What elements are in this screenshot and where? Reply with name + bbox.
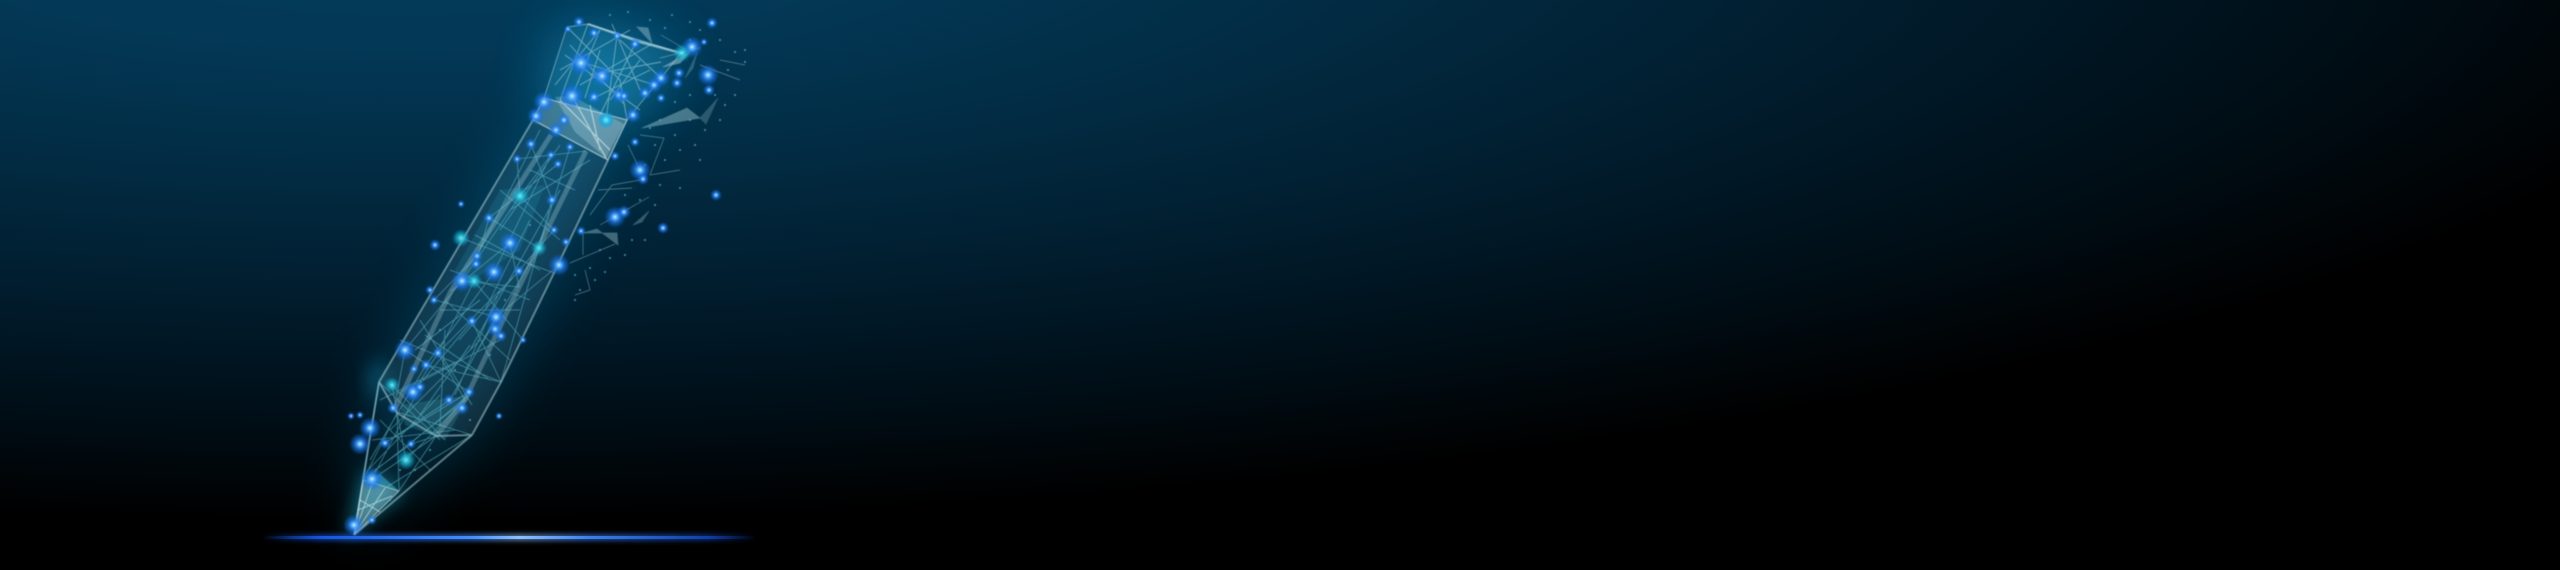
pencil body facets bbox=[354, 120, 608, 535]
glowing nodes bbox=[343, 16, 722, 536]
pencil tip bbox=[354, 474, 399, 535]
wire mesh bbox=[363, 130, 590, 491]
debris shards bbox=[570, 27, 745, 295]
pencil glow bbox=[345, 27, 681, 540]
pencil wireframe group bbox=[343, 12, 745, 536]
baseline glow line bbox=[262, 534, 757, 541]
pencil eraser end bbox=[544, 24, 681, 120]
cyan nodes bbox=[384, 44, 691, 470]
debris specks bbox=[380, 12, 745, 500]
pencil collar band bbox=[533, 96, 627, 160]
